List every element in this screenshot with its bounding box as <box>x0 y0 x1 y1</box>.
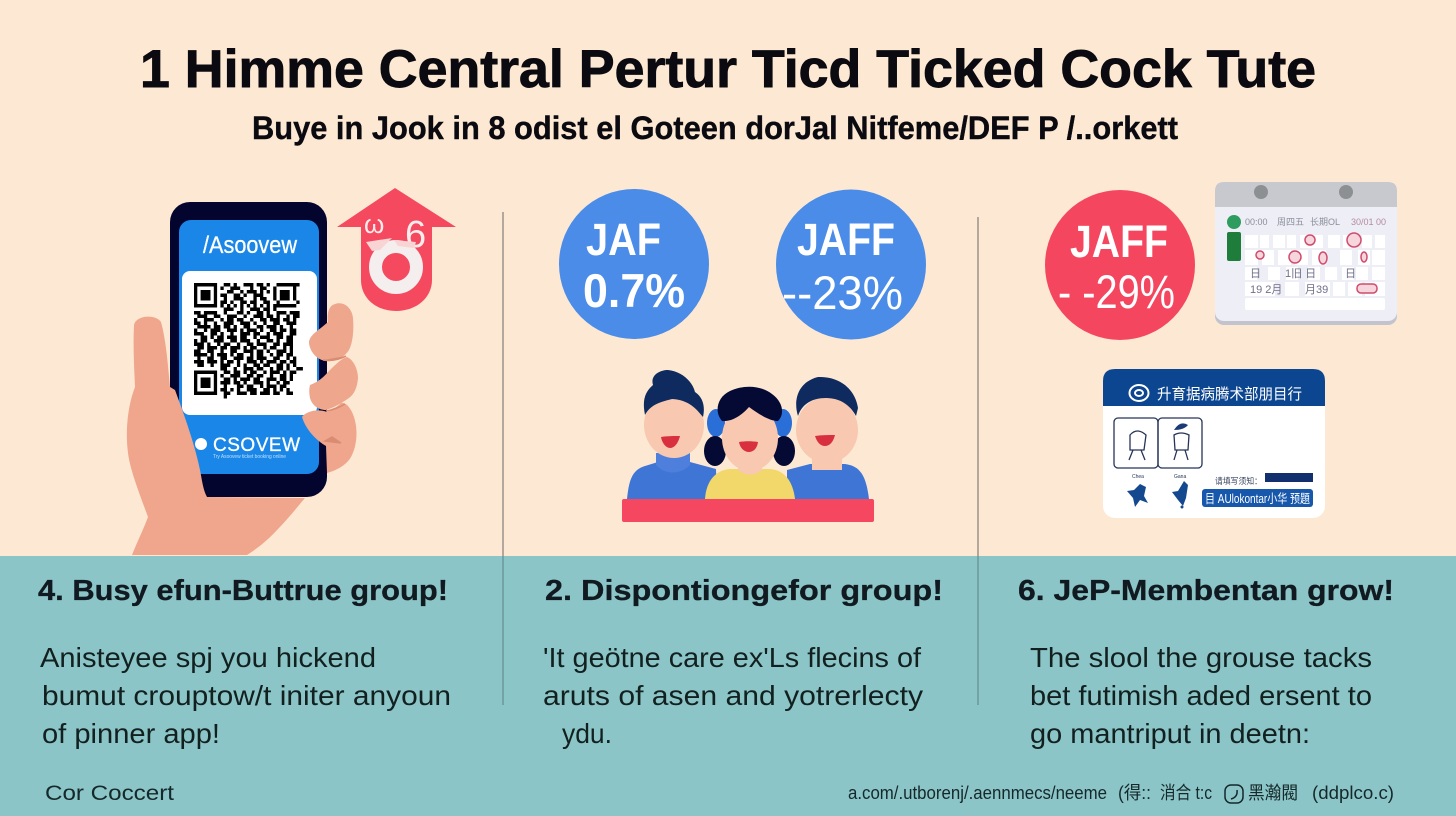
hand: thumb and palm <box>127 317 305 555</box>
person: left <box>627 370 717 499</box>
column 3 heading: 6. JeP-Membentan grow! <box>1018 575 1394 607</box>
stat circle: JAFF -29%: JAFF <box>1070 216 1168 267</box>
stat circle: JAF 0.7%: JAF <box>586 214 661 265</box>
column 2 text <box>543 575 943 749</box>
calendar header labels <box>1227 215 1386 229</box>
small labels: Chea <box>1132 474 1144 480</box>
column 2 body: ydu. <box>562 718 612 749</box>
footer right <box>848 783 1394 803</box>
panel: lower teal band <box>0 556 1456 816</box>
icon: red up arrow badge <box>337 188 456 311</box>
person: right <box>787 377 869 499</box>
footer right: (ddplco.c) <box>1312 783 1394 803</box>
column 3 body: bet futimish aded ersent to <box>1030 680 1372 711</box>
illustration: three smiling people <box>622 370 874 522</box>
calendar rings <box>1254 185 1353 199</box>
card field: 请填写须知： <box>1215 476 1262 486</box>
badge number: 6 <box>405 214 426 256</box>
column 3 body: The slool the grouse tacks <box>1030 642 1372 673</box>
column 1 body: of pinner app! <box>42 718 220 749</box>
QR card <box>182 271 317 415</box>
column 2 body: 'It geötne care ex'Ls flecins of <box>543 642 921 673</box>
footer right: (得:: <box>1118 783 1151 803</box>
phone body <box>170 202 327 497</box>
calendar numbers: 日 <box>1250 268 1261 280</box>
column 3 body: go mantriput in deetn: <box>1030 718 1310 749</box>
stat circle: JAFF -29%: - -29% <box>1058 265 1175 318</box>
calendar header labels: 00:00 <box>1245 217 1268 227</box>
QR code <box>194 285 303 397</box>
icon: swirl <box>1130 385 1148 401</box>
column 1 body <box>40 642 451 749</box>
calendar header labels: 长期OL <box>1310 216 1340 227</box>
small labels <box>1132 474 1186 480</box>
column 2 body: aruts of asen and yotrerlecty <box>543 680 923 711</box>
ticket card <box>1103 369 1325 518</box>
icon: calendar <box>1215 182 1397 325</box>
calendar grid <box>1245 235 1385 310</box>
calendar doodles <box>1256 233 1377 293</box>
figure boxes <box>1114 418 1202 468</box>
footer right: 黑瀚閥 <box>1248 783 1298 803</box>
blue figures <box>1127 481 1188 508</box>
subtitle: Buye in Jook in 8 odist el Goteen dorJal Nitfeme/DEF P /..orkett <box>252 110 1178 146</box>
calendar side tab <box>1227 232 1241 261</box>
badge number: ω <box>364 209 384 239</box>
column 3 text <box>1018 575 1394 749</box>
calendar header labels: 30/01 00 <box>1351 217 1386 227</box>
icon: circled mark <box>1225 785 1243 803</box>
icon: ring <box>376 246 416 288</box>
card header <box>1103 369 1325 406</box>
calendar numbers: 日 <box>1345 268 1356 280</box>
column 2 heading: 2. Dispontiongefor group! <box>545 575 943 607</box>
stat circle: JAFF -29% <box>1045 190 1195 340</box>
footer right: a.com/.utborenj/.aennmecs/neeme <box>848 783 1107 803</box>
screen logo <box>195 435 300 460</box>
column 3 body <box>1030 642 1372 749</box>
stat circle: JAFF -23% <box>776 190 926 340</box>
person: middle <box>704 387 795 499</box>
phone screen <box>179 220 319 474</box>
calendar numbers: 月39 <box>1305 284 1328 296</box>
screen logo: CSOVEW <box>213 435 300 456</box>
stat circle: JAF 0.7%: 0.7% <box>583 264 685 317</box>
footer right: 消合 t:c <box>1160 783 1212 803</box>
badge number <box>364 209 426 256</box>
stat circle: JAFF -23%: --23% <box>782 266 903 319</box>
people: red banner <box>622 499 874 522</box>
screen logo: Try Asoovew ticket booking online <box>213 454 286 460</box>
column 1 text <box>38 575 451 749</box>
stat circle: JAF 0.7% <box>559 189 709 339</box>
card button: 目 AUlokontar小华 预題 <box>1205 491 1310 506</box>
card header text: 升育据病腾术部朋目行 <box>1157 386 1302 403</box>
column 1 body: bumut crouptow/t initer anyoun <box>42 680 451 711</box>
hand: fingers <box>302 303 358 473</box>
screen heading: /Asoovew <box>203 232 298 259</box>
title: 1 Himme Central Pertur Ticd Ticked Cock Tute <box>140 40 1316 99</box>
footer left: Cor Coccert <box>45 782 174 805</box>
illustration: hand holding phone with QR code <box>127 202 358 555</box>
calendar numbers: 1旧 日 <box>1285 267 1316 280</box>
column 1 body: Anisteyee spj you hickend <box>40 642 376 673</box>
column 2 body <box>543 642 923 749</box>
calendar numbers: 19 2月 <box>1250 284 1282 296</box>
small labels: Gana <box>1174 474 1186 480</box>
calendar numbers <box>1250 267 1356 296</box>
column 1 heading: 4. Busy efun-Buttrue group! <box>38 575 448 607</box>
calendar header labels: 周四五 <box>1277 217 1304 227</box>
stat circle: JAFF -23%: JAFF <box>797 214 895 265</box>
card button <box>1202 489 1313 507</box>
